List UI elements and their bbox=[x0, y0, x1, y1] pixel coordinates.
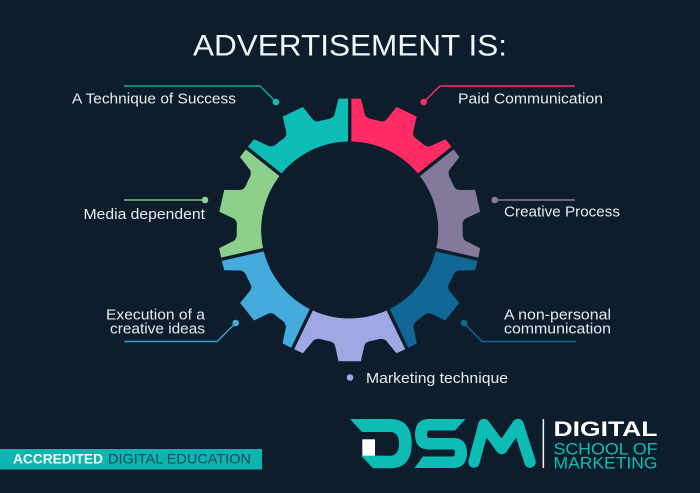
leader dot bbox=[491, 197, 498, 203]
title: ADVERTISEMENT IS: bbox=[193, 30, 507, 63]
label text line one: A non-personal bbox=[504, 308, 611, 324]
gear segment: marketing technique bbox=[294, 310, 405, 361]
label text line two: creative ideas bbox=[110, 321, 205, 337]
logo: Digital School of Marketing bbox=[350, 418, 658, 472]
gear segment: technique of success bbox=[243, 88, 365, 182]
leader dot bbox=[347, 374, 353, 381]
accreditation banner bbox=[0, 449, 262, 470]
label text: Paid Communication bbox=[458, 92, 603, 108]
leader dot bbox=[202, 197, 208, 203]
label text: Media dependent bbox=[84, 207, 205, 223]
leader line bbox=[495, 199, 575, 201]
label text line two: communication bbox=[504, 321, 611, 337]
gear segment: creative process bbox=[416, 147, 490, 266]
leader line bbox=[124, 86, 276, 102]
banner text: digital education: DIGITAL EDUCATION bbox=[108, 451, 251, 467]
leader line bbox=[424, 86, 575, 102]
logo letter S bbox=[414, 419, 467, 468]
logo text: digital: DIGITAL bbox=[554, 418, 658, 441]
gear segment: execution of creative ideas bbox=[213, 237, 321, 355]
banner bar bbox=[0, 449, 262, 470]
logo white square bbox=[362, 439, 375, 456]
logo text: marketing: MARKETING bbox=[554, 454, 658, 472]
leader dot bbox=[273, 99, 279, 105]
label: Marketing technique bbox=[347, 371, 508, 387]
logo divider bbox=[543, 419, 544, 468]
leader line bbox=[464, 323, 576, 342]
banner text: accredited: ACCREDITED bbox=[13, 451, 103, 467]
leader line bbox=[124, 323, 236, 342]
logo text: school of: SCHOOL OF bbox=[554, 440, 658, 458]
label: A non-personal communication bbox=[461, 308, 611, 342]
leader line bbox=[124, 199, 205, 201]
leader dot bbox=[232, 320, 239, 326]
gear segment: paid communication bbox=[335, 88, 457, 182]
label: Execution of a creative ideas bbox=[106, 308, 239, 342]
logo letter D bbox=[350, 419, 412, 468]
label: A Technique of Success bbox=[72, 86, 279, 108]
leader dot bbox=[461, 320, 467, 326]
logo letter M bbox=[474, 424, 530, 462]
label text line one: Execution of a bbox=[106, 308, 206, 324]
label: Creative Process bbox=[491, 197, 620, 221]
chart: seven-part gear ring bbox=[209, 88, 490, 361]
gear segment: media dependent bbox=[209, 147, 284, 266]
label: Media dependent bbox=[84, 197, 208, 223]
label text: A Technique of Success bbox=[72, 92, 236, 108]
label text: Marketing technique bbox=[366, 371, 508, 387]
label: Paid Communication bbox=[420, 86, 603, 108]
leader dot bbox=[420, 99, 427, 105]
gear segment: non-personal communication bbox=[378, 237, 487, 355]
label text: Creative Process bbox=[504, 205, 620, 221]
